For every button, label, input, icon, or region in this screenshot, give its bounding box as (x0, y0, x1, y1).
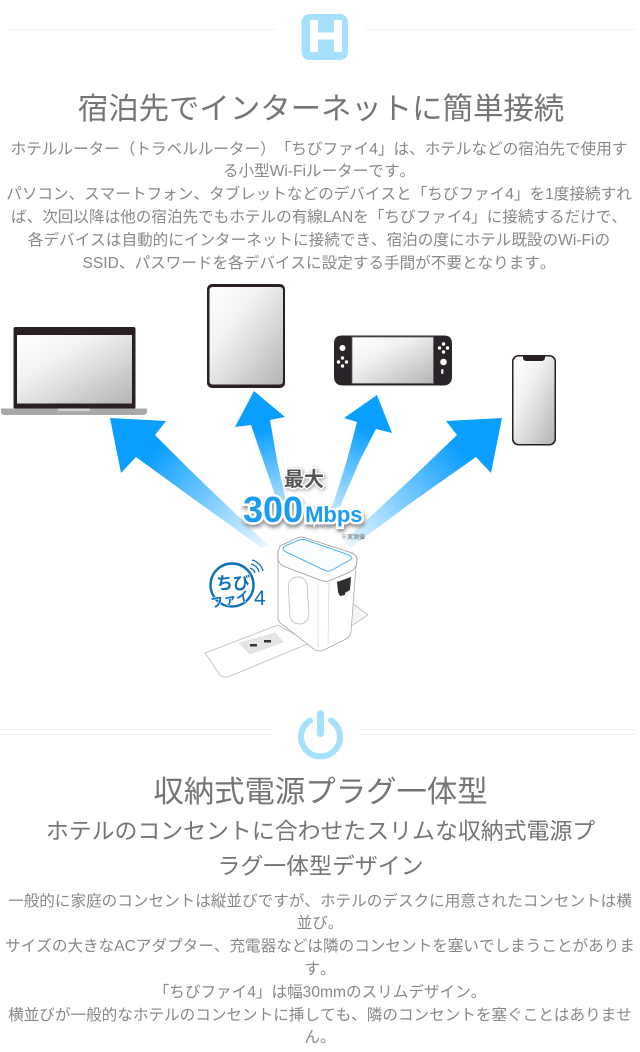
icon: hotel H (302, 14, 348, 60)
text block: router description: ホテルルーター（トラベルルーター）「ちびファイ4」は、ホテルなどの宿泊先で使用す (11, 141, 627, 158)
heading: retractable plug: 収納式電源プラグ一体型 (153, 774, 488, 808)
text block: plug description: 並び。 (297, 915, 343, 932)
router body (278, 552, 356, 651)
divider: section 2 right (361, 729, 635, 730)
divider: section 2 right lower (361, 734, 635, 735)
text block: router description: 各デバイスは自動的にインターネットに接続でき、宿泊の度にホテル既設のWi-Fiの (28, 232, 610, 249)
text block: plug description (5, 892, 635, 1046)
speed label: maximum 300Mbps: 最大 (284, 468, 324, 491)
icon: power symbol (301, 710, 340, 756)
speed label: maximum 300Mbps: 300Mbps (243, 489, 363, 530)
device: smartphone (512, 355, 556, 446)
device: handheld game console (334, 336, 452, 386)
heading: hotel internet connection: 宿泊先でインターネットに簡単接続 (78, 92, 564, 126)
text block: router description: パソコン、スマートフォン、タブレットなどのデバイスと「ちびファイ4」を1度接続すれ (6, 186, 632, 203)
ethernet port (337, 577, 351, 596)
logo: chibi-fi 4: 4 (254, 587, 266, 610)
text block: plug description: ん。 (304, 1029, 336, 1046)
illustration: travel router on power strip (205, 537, 368, 677)
side pill outline (288, 577, 309, 624)
speed label: maximum 300Mbps (243, 468, 365, 541)
device: tablet (207, 284, 285, 388)
text block: plug description: 横並びが一般的なホテルのコンセントに挿しても、隣のコンセントを塞ぐことはありませ (8, 1007, 632, 1024)
divider: section 2 left (0, 729, 273, 730)
subheading: slim plug design: ホテルのコンセントに合わせたスリムな収納式電源プ (46, 818, 595, 844)
divider: section 2 left lower (0, 734, 273, 735)
arrow: to smartphone (344, 418, 502, 548)
subheading: slim plug design (46, 818, 595, 878)
text block: router description (6, 140, 632, 272)
speed label: maximum 300Mbps: 最大 (285, 469, 325, 492)
divider: section 1 right (365, 29, 636, 30)
arrow: to laptop (110, 418, 268, 548)
text block: plug description: す。 (304, 961, 336, 978)
speed label: maximum 300Mbps: ※実測値 (341, 533, 365, 541)
logo: chibi-fi 4 (209, 560, 266, 611)
logo: chibi-fi 4: ファイ (209, 588, 251, 611)
divider: section 1 left (7, 29, 276, 30)
speed label: maximum 300Mbps: 300Mbps (244, 492, 364, 533)
device: laptop (1, 327, 147, 415)
arrow: to game console (325, 395, 392, 530)
text block: plug description: 「ちびファイ4」は幅30mmのスリムデザイン。 (154, 984, 486, 1001)
text block: router description: る小型Wi-Fiルーターです。 (223, 163, 415, 180)
text block: plug description: サイズの大きなACアダプター、充電器などは隣のコンセントを塞いでしまうことがありま (5, 938, 635, 955)
text block: router description: SSID、パスワードを各デバイスに設定する手間が不要となります。 (82, 255, 556, 272)
text block: plug description: 一般的に家庭のコンセントは縦並びですが、ホテルのデスクに用意されたコンセントは横 (8, 893, 632, 910)
subheading: slim plug design: ラグ一体型デザイン (217, 852, 424, 878)
text block: router description: ば、次回以降は他の宿泊先でもホテルの有線LANを「ちびファイ4」に接続するだけで、 (11, 209, 627, 226)
power strip plate (205, 603, 368, 677)
arrow: to tablet (235, 391, 292, 530)
router top panel (283, 540, 352, 571)
logo: chibi-fi 4: ちび (216, 574, 250, 593)
